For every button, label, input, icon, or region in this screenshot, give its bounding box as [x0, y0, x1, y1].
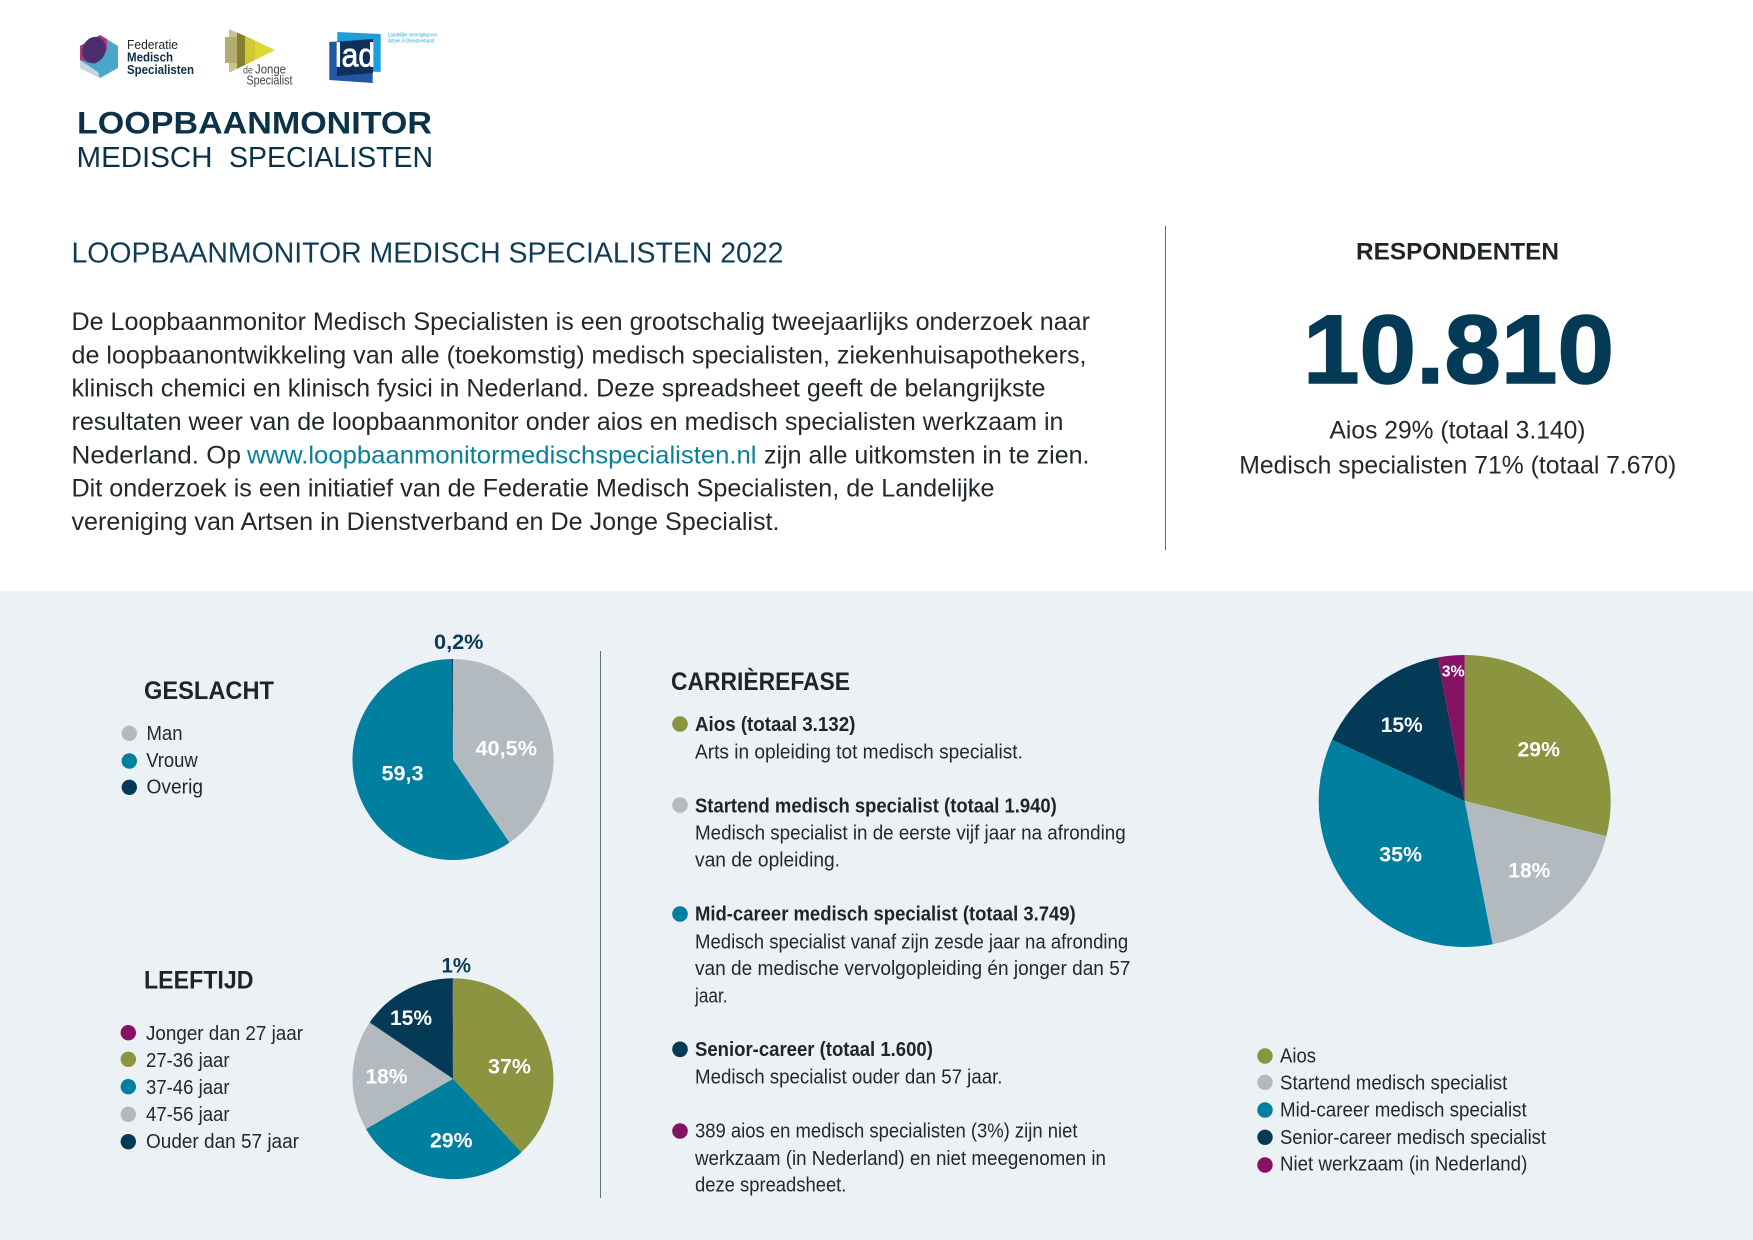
pie chart: leeftijd: 18% — [366, 1065, 408, 1088]
item: aios — [672, 714, 1023, 763]
pie chart: leeftijd: 15% — [390, 1007, 432, 1030]
logo: LAD — [329, 32, 437, 83]
text block: intro: Dit onderzoek is een initiatief van de Federatie Medisch Specialisten, de Landelijke — [72, 475, 994, 503]
pie chart: carrierefase: 18% — [1508, 860, 1551, 883]
text block: intro: vereniging van Artsen in Dienstverband en De Jonge Specialist. — [72, 508, 779, 536]
item: mid-career medisch specialist: Medisch specialist vanaf zijn zesde jaar na afronding — [695, 931, 1128, 953]
item: senior-career — [672, 1039, 1002, 1088]
title — [76, 104, 433, 174]
item: startend medisch specialist: Medisch specialist in de eerste vijf jaar na afronding — [695, 822, 1126, 844]
panel: respondenten: RESPONDENTEN — [1356, 238, 1559, 265]
panel: leeftijd: LEEFTIJD — [144, 966, 254, 994]
panel: carrierefase — [671, 667, 1130, 1197]
title: MEDISCH — [76, 142, 212, 174]
logo: de Jonge Specialist — [225, 29, 293, 88]
legend: geslacht: Overig — [146, 776, 203, 798]
pie chart: geslacht — [352, 631, 553, 860]
panel: respondenten: Medisch specialisten 71% (totaal 7.670) — [1239, 451, 1676, 479]
item: niet werkzaam note: werkzaam (in Nederland) en niet meegenomen in — [694, 1148, 1106, 1170]
heading: intro: LOOPBAANMONITOR MEDISCH SPECIALISTEN 2022 — [72, 238, 784, 270]
pie chart: carrierefase: 35% — [1379, 844, 1422, 867]
logo: LAD: lad — [335, 37, 375, 74]
item: niet werkzaam note — [672, 1121, 1106, 1197]
logo: LAD: Artsen in Dienstverband — [388, 39, 434, 45]
panel: leeftijd — [121, 955, 553, 1179]
panel: geslacht — [122, 631, 553, 860]
legend: geslacht — [122, 723, 203, 798]
pie chart: leeftijd — [353, 955, 553, 1179]
text block: intro — [72, 308, 1090, 536]
legend: carrierefase: Aios — [1280, 1046, 1316, 1068]
pie chart: geslacht: 40,5% — [476, 738, 537, 761]
pie chart: carrierefase: 29% — [1518, 739, 1560, 762]
pie chart: carrierefase — [1319, 655, 1611, 947]
title: SPECIALISTEN — [229, 142, 433, 174]
legend: leeftijd: 27-36 jaar — [146, 1050, 230, 1072]
text block: intro: Nederland. Op — [72, 441, 241, 469]
item: niet werkzaam note: 389 aios en medisch specialisten (3%) zijn niet — [695, 1121, 1078, 1143]
item: startend medisch specialist: van de opleiding. — [695, 850, 840, 872]
item: niet werkzaam note: deze spreadsheet. — [695, 1175, 846, 1197]
item: aios: Arts in opleiding tot medisch specialist. — [695, 741, 1023, 763]
panel: geslacht: GESLACHT — [144, 677, 274, 705]
panel: results background — [0, 591, 1753, 1240]
item: mid-career medisch specialist: Mid-career medisch specialist (totaal 3.749) — [695, 904, 1076, 926]
pie chart: leeftijd: 29% — [430, 1129, 473, 1152]
logo: Federatie Medisch Specialisten: Specialisten — [127, 63, 194, 77]
title: LOOPBAANMONITOR — [77, 104, 432, 140]
legend: geslacht: Vrouw — [146, 750, 198, 772]
logo: LAD: Landelijke vereniging van — [388, 33, 437, 39]
logo: Federatie Medisch Specialisten: Federatie — [127, 38, 178, 52]
logo: de Jonge Specialist: Specialist — [246, 74, 293, 88]
pie chart: leeftijd: 37% — [488, 1055, 531, 1078]
item: senior-career: Medisch specialist ouder dan 57 jaar. — [695, 1066, 1002, 1088]
legend: carrierefase: Niet werkzaam (in Nederland) — [1280, 1154, 1527, 1176]
item: aios: Aios (totaal 3.132) — [695, 714, 855, 736]
item: startend medisch specialist — [672, 795, 1126, 872]
item: mid-career medisch specialist: van de medische vervolgopleiding én jonger dan 57 — [695, 958, 1130, 980]
pie chart: leeftijd: 1% — [442, 955, 471, 978]
legend: carrierefase — [1257, 1046, 1546, 1176]
logo: de Jonge Specialist: de — [243, 65, 253, 76]
legend: leeftijd: Ouder dan 57 jaar — [146, 1131, 299, 1153]
text block: intro: resultaten weer van de loopbaanmonitor onder aios en medisch specialisten werkzaam in — [72, 408, 1064, 436]
legend: leeftijd: Jonger dan 27 jaar — [146, 1023, 303, 1045]
pie chart: geslacht: 0,2% — [434, 631, 484, 654]
legend: carrierefase: Mid-career medisch specialist — [1280, 1100, 1527, 1122]
item: senior-career: Senior-career (totaal 1.600) — [695, 1039, 933, 1061]
pie chart: carrierefase: 15% — [1381, 714, 1423, 737]
panel: respondenten: Aios 29% (totaal 3.140) — [1330, 416, 1586, 444]
item: mid-career medisch specialist — [672, 904, 1130, 1007]
item: mid-career medisch specialist: jaar. — [694, 985, 728, 1007]
item: startend medisch specialist: Startend medisch specialist (totaal 1.940) — [695, 795, 1057, 817]
panel: carrierefase: CARRIÈREFASE — [671, 667, 850, 696]
logo: Federatie Medisch Specialisten: Medisch — [127, 51, 173, 65]
total respondents number: 10.810 — [1303, 295, 1614, 404]
text block: intro: zijn alle uitkomsten in te zien. — [764, 441, 1090, 469]
pie chart: geslacht: 59,3 — [382, 763, 424, 786]
legend: leeftijd: 47-56 jaar — [146, 1104, 230, 1126]
legend: leeftijd — [121, 1023, 303, 1153]
panel: respondenten — [1239, 238, 1676, 479]
logo: de Jonge Specialist: Jonge — [255, 62, 286, 76]
text block: intro: klinisch chemici en klinisch fysici in Nederland. Deze spreadsheet geeft de belangrijkste — [72, 375, 1046, 403]
logo: Federatie Medisch Specialisten — [78, 33, 194, 78]
legend: leeftijd: 37-46 jaar — [146, 1077, 230, 1099]
text block: intro: de loopbaanontwikkeling van alle (toekomstig) medisch specialisten, ziekenhuisapothekers, — [72, 341, 1086, 369]
text block: intro: www.loopbaanmonitormedischspecialisten.nl — [246, 441, 757, 469]
legend: carrierefase: Startend medisch specialist — [1280, 1072, 1508, 1094]
legend: geslacht: Man — [146, 723, 182, 745]
legend: carrierefase: Senior-career medisch specialist — [1280, 1127, 1546, 1149]
text block: intro: De Loopbaanmonitor Medisch Specialisten is een grootschalig tweejaarlijks onderzoek naar — [72, 308, 1090, 336]
pie chart: carrierefase: 3% — [1442, 664, 1465, 681]
